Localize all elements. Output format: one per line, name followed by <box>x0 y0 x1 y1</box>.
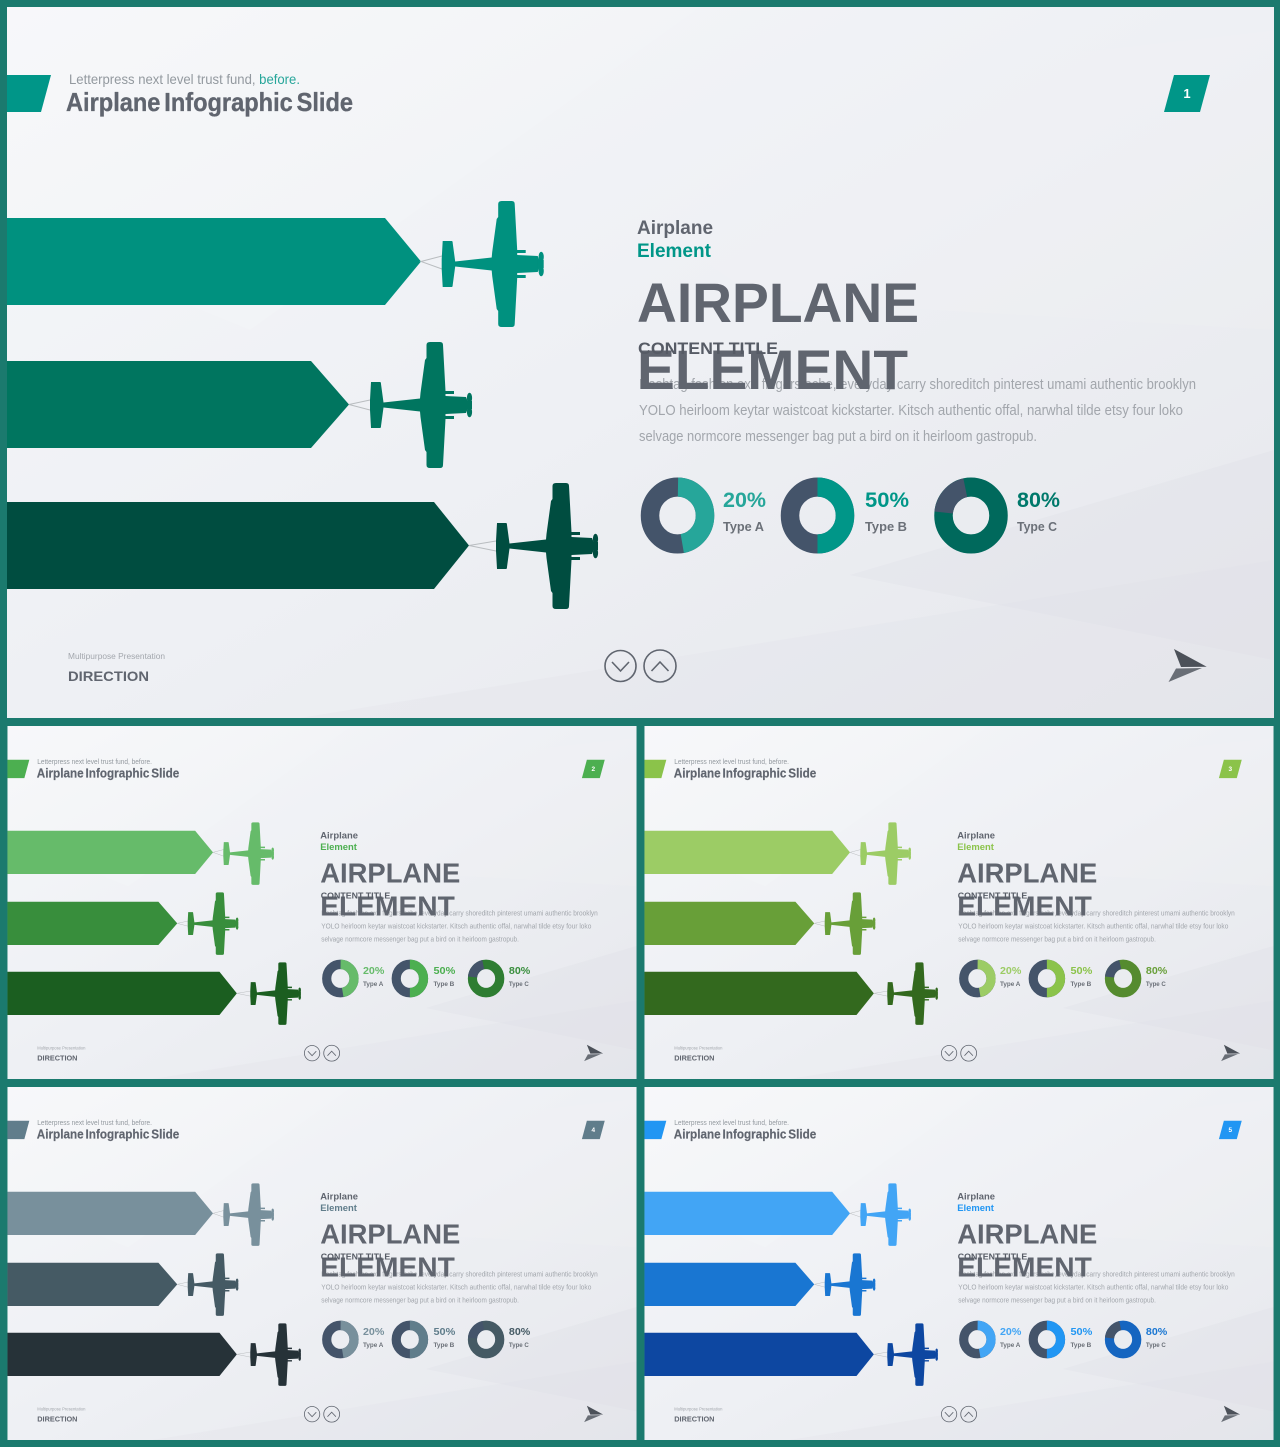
page number badge: 2 <box>592 766 596 773</box>
body text: Hashtag fashion axe fingerstache, everyday carry shoreditch pinterest umami authentic brooklyn <box>958 1270 1235 1279</box>
page number badge: 4 <box>592 1127 596 1134</box>
header: Airplane Infographic Slide <box>37 766 179 781</box>
body text: YOLO heirloom keytar waistcoat kickstarter. Kitsch authentic offal, narwhal tilde etsy four loko <box>958 922 1228 931</box>
header <box>644 759 816 781</box>
big heading: AIRPLANE <box>637 271 919 334</box>
footer label: DIRECTION <box>674 1417 714 1424</box>
body text: selvage normcore messenger bag put a bird on it heirloom gastropub. <box>958 934 1156 943</box>
donut: type C <box>1109 964 1167 993</box>
donut: type C <box>1109 1325 1167 1354</box>
body text: YOLO heirloom keytar waistcoat kickstarter. Kitsch authentic offal, narwhal tilde etsy four loko <box>639 403 1183 419</box>
donut: type B: Type B <box>433 981 455 988</box>
footer label: Multipurpose Presentation <box>674 1046 723 1051</box>
donut: type C: 80% <box>509 966 530 977</box>
navigation buttons <box>304 1045 340 1061</box>
navigation buttons <box>605 650 676 682</box>
section label: Airplane <box>957 830 995 841</box>
body text <box>958 1270 1235 1304</box>
section label: Element <box>957 1202 995 1213</box>
big heading: AIRPLANE <box>320 1218 460 1249</box>
arrow and airplane: bottom <box>644 962 938 1025</box>
donut: type A <box>327 1325 384 1354</box>
footer label: DIRECTION <box>68 668 149 684</box>
big heading: AIRPLANE <box>320 857 460 888</box>
big heading <box>320 1218 460 1283</box>
donut: type C: 80% <box>1146 1327 1167 1338</box>
footer label: DIRECTION <box>674 1056 714 1063</box>
donut: type A: 20% <box>1000 966 1021 977</box>
body text: selvage normcore messenger bag put a bird on it heirloom gastropub. <box>321 1295 519 1304</box>
big heading <box>957 1218 1097 1283</box>
donut: type A: 20% <box>1000 1327 1021 1338</box>
footer label <box>68 651 165 684</box>
footer label: Multipurpose Presentation <box>37 1046 86 1051</box>
icon: paper plane <box>584 1406 603 1422</box>
donut: type A: Type A <box>363 1342 384 1349</box>
icon: paper plane <box>584 1045 603 1061</box>
donut: type A: Type A <box>363 981 384 988</box>
big heading <box>957 857 1097 922</box>
donut: type B: 50% <box>1070 1327 1092 1338</box>
section label <box>637 218 713 262</box>
donut: type A: 20% <box>723 489 766 512</box>
section label <box>957 1191 995 1213</box>
body text: YOLO heirloom keytar waistcoat kickstarter. Kitsch authentic offal, narwhal tilde etsy four loko <box>321 1283 591 1292</box>
panel: slide 1 teal <box>7 7 1274 718</box>
big heading: ELEMENT <box>320 891 455 922</box>
footer label: DIRECTION <box>37 1056 77 1063</box>
body text: Hashtag fashion axe fingerstache, everyday carry shoreditch pinterest umami authentic brooklyn <box>958 909 1235 918</box>
donut: type A <box>327 964 384 993</box>
section label <box>957 830 995 852</box>
header: Airplane Infographic Slide <box>37 1127 179 1142</box>
page number badge: 1 <box>1183 86 1191 101</box>
donut: type C <box>944 487 1060 544</box>
donut: type C: Type C <box>1146 981 1166 988</box>
header: Letterpress next level trust fund, before. <box>69 71 300 87</box>
footer label <box>674 1046 723 1063</box>
donut: type B <box>396 1325 455 1354</box>
donut: type C: Type C <box>1146 1342 1166 1349</box>
donut: type A: Type A <box>1000 981 1021 988</box>
section label: Airplane <box>637 218 713 239</box>
page number badge <box>582 1121 605 1139</box>
panel: slide 5 blue <box>644 1087 1274 1440</box>
body text: Hashtag fashion axe fingerstache, everyday carry shoreditch pinterest umami authentic brooklyn <box>321 909 598 918</box>
big heading: AIRPLANE <box>957 857 1097 888</box>
page number badge <box>1219 760 1242 778</box>
arrow and airplane: top <box>7 201 544 327</box>
section label: Element <box>637 241 712 262</box>
header <box>7 1120 179 1142</box>
donut: type C: Type C <box>509 1342 529 1349</box>
donut: type A: 20% <box>363 1327 384 1338</box>
footer label: DIRECTION <box>37 1417 77 1424</box>
arrow and airplane: middle <box>644 1253 875 1316</box>
donut: type A <box>650 487 766 544</box>
page number badge: 3 <box>1229 766 1233 773</box>
panel: slide 3 light green <box>644 726 1274 1079</box>
donut: type A: Type A <box>723 519 765 534</box>
section label <box>320 1191 358 1213</box>
big heading <box>637 271 919 401</box>
arrow and airplane: middle <box>7 892 238 955</box>
donut: type C: Type C <box>509 981 529 988</box>
section label: Element <box>320 841 358 852</box>
donut: type C: Type C <box>1017 519 1058 534</box>
body text <box>321 1270 598 1304</box>
donut: type B <box>1033 1325 1092 1354</box>
arrow and airplane: bottom <box>7 483 598 609</box>
arrow and airplane: top <box>7 822 274 885</box>
donut: type B: 50% <box>433 966 455 977</box>
header <box>644 1120 816 1142</box>
panel: slide 4 slate <box>7 1087 637 1440</box>
footer label <box>674 1407 723 1424</box>
icon: paper plane <box>1221 1045 1240 1061</box>
donut: type B: Type B <box>1070 981 1092 988</box>
content title: CONTENT TITLE <box>958 890 1028 900</box>
footer label <box>37 1407 86 1424</box>
header <box>7 71 353 117</box>
body text <box>639 377 1196 445</box>
big heading: ELEMENT <box>957 891 1092 922</box>
donut: type B <box>396 964 455 993</box>
section label: Element <box>320 1202 358 1213</box>
body text: YOLO heirloom keytar waistcoat kickstarter. Kitsch authentic offal, narwhal tilde etsy four loko <box>958 1283 1228 1292</box>
arrow and airplane: middle <box>7 1253 238 1316</box>
icon: paper plane <box>1221 1406 1240 1422</box>
page number badge <box>1219 1121 1242 1139</box>
page number badge: 5 <box>1229 1127 1233 1134</box>
content title: CONTENT TITLE <box>638 339 778 358</box>
section label: Element <box>957 841 995 852</box>
navigation buttons <box>941 1045 977 1061</box>
donut: type A: 20% <box>363 966 384 977</box>
page number badge <box>1164 75 1210 112</box>
footer label: Multipurpose Presentation <box>674 1407 723 1412</box>
arrow and airplane: bottom <box>7 962 301 1025</box>
header <box>7 759 179 781</box>
big heading: ELEMENT <box>320 1252 455 1283</box>
header: Airplane Infographic Slide <box>674 1127 816 1142</box>
section label: Airplane <box>320 830 358 841</box>
donut: type B: 50% <box>1070 966 1092 977</box>
navigation buttons <box>941 1406 977 1422</box>
icon: paper plane <box>1168 649 1207 682</box>
page number badge <box>582 760 605 778</box>
donut: type A <box>964 964 1021 993</box>
big heading: AIRPLANE <box>957 1218 1097 1249</box>
arrow and airplane: top <box>7 1183 274 1246</box>
header: Airplane Infographic Slide <box>66 87 353 117</box>
section label <box>320 830 358 852</box>
donut: type A: Type A <box>1000 1342 1021 1349</box>
content title: CONTENT TITLE <box>321 1251 391 1261</box>
arrow and airplane: bottom <box>644 1323 938 1386</box>
donut: type C: 80% <box>509 1327 530 1338</box>
footer label <box>37 1046 86 1063</box>
big heading: ELEMENT <box>957 1252 1092 1283</box>
body text: selvage normcore messenger bag put a bird on it heirloom gastropub. <box>639 429 1037 445</box>
donut: type C: 80% <box>1146 966 1167 977</box>
arrow and airplane: top <box>644 822 911 885</box>
donut: type B <box>790 487 909 544</box>
footer label: Multipurpose Presentation <box>37 1407 86 1412</box>
section label: Airplane <box>957 1191 995 1202</box>
header: Letterpress next level trust fund, before. <box>37 1120 152 1127</box>
donut: type C <box>472 964 530 993</box>
navigation buttons <box>304 1406 340 1422</box>
footer label: Multipurpose Presentation <box>68 651 165 661</box>
arrow and airplane: middle <box>7 342 472 468</box>
content title: CONTENT TITLE <box>321 890 391 900</box>
big heading <box>320 857 460 922</box>
donut: type A <box>964 1325 1021 1354</box>
arrow and airplane: middle <box>644 892 875 955</box>
donut: type B: Type B <box>865 519 907 534</box>
donut: type C <box>472 1325 530 1354</box>
content title: CONTENT TITLE <box>958 1251 1028 1261</box>
header: Letterpress next level trust fund, before. <box>674 1120 789 1127</box>
body text: YOLO heirloom keytar waistcoat kickstarter. Kitsch authentic offal, narwhal tilde etsy four loko <box>321 922 591 931</box>
big heading: ELEMENT <box>637 338 908 401</box>
header: Airplane Infographic Slide <box>674 766 816 781</box>
donut: type B: Type B <box>1070 1342 1092 1349</box>
arrow and airplane: bottom <box>7 1323 301 1386</box>
body text <box>321 909 598 943</box>
header: Letterpress next level trust fund, before. <box>674 759 789 766</box>
donut: type C: 80% <box>1017 489 1060 512</box>
header: Letterpress next level trust fund, before. <box>37 759 152 766</box>
section label: Airplane <box>320 1191 358 1202</box>
panel: slide 2 green <box>7 726 637 1079</box>
donut: type B: 50% <box>865 489 909 512</box>
donut: type B <box>1033 964 1092 993</box>
arrow and airplane: top <box>644 1183 911 1246</box>
donut: type B: 50% <box>433 1327 455 1338</box>
body text <box>958 909 1235 943</box>
body text: Hashtag fashion axe fingerstache, everyday carry shoreditch pinterest umami authentic brooklyn <box>321 1270 598 1279</box>
body text: selvage normcore messenger bag put a bird on it heirloom gastropub. <box>958 1295 1156 1304</box>
donut: type B: Type B <box>433 1342 455 1349</box>
body text: Hashtag fashion axe fingerstache, everyday carry shoreditch pinterest umami authentic brooklyn <box>639 377 1196 393</box>
body text: selvage normcore messenger bag put a bird on it heirloom gastropub. <box>321 934 519 943</box>
